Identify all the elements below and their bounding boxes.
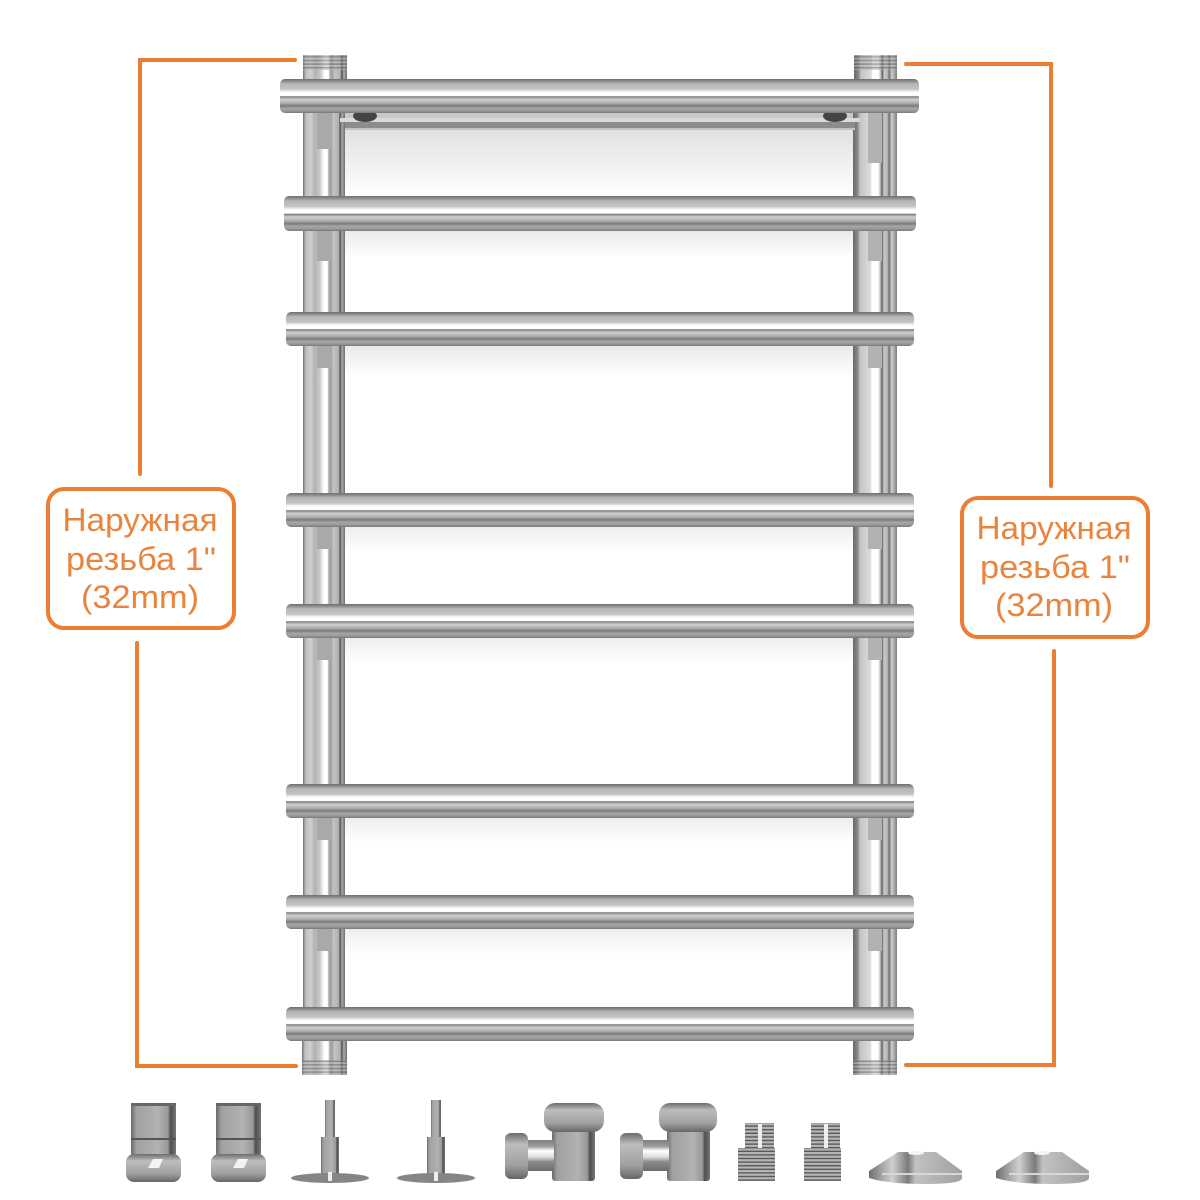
- fitting: angle valve 2: [620, 1103, 717, 1181]
- callout: right thread label: [962, 498, 1148, 637]
- upper right thread: [854, 55, 897, 79]
- fitting: cone cover 1: [869, 1151, 962, 1184]
- callout: left thread label: [48, 489, 234, 628]
- crossbar 4: [286, 493, 914, 527]
- crossbar 7: [286, 895, 914, 929]
- crossbar 2: [284, 196, 916, 231]
- callout: left thread label: резьба 1": [66, 541, 216, 577]
- left vertical pipes: [303, 113, 345, 1041]
- callout: right thread label: Наружная: [976, 510, 1132, 546]
- fitting: threaded adapter 1: [738, 1123, 775, 1181]
- callout: right thread label: резьба 1": [980, 549, 1130, 585]
- inner top frame: [340, 110, 860, 130]
- bracket: upper-left to lower-left: [137, 60, 296, 1066]
- fitting: flange pin 2: [397, 1100, 475, 1183]
- upper left thread: [303, 55, 347, 79]
- fitting: threaded adapter 2: [804, 1123, 841, 1181]
- crossbar 1 (shelf): [280, 79, 919, 113]
- lower left thread: [302, 1041, 347, 1075]
- bracket: upper-right to lower-right: [906, 64, 1054, 1065]
- right vertical pipes: [853, 113, 897, 1041]
- crossbar 5: [286, 604, 914, 638]
- fittings row: [126, 1100, 1089, 1184]
- fitting: angle valve 1: [505, 1103, 604, 1181]
- fitting: cone cover 2: [996, 1151, 1089, 1184]
- lower right thread: [853, 1041, 897, 1075]
- crossbar 3: [286, 312, 914, 346]
- callout: left thread label: (32mm): [81, 579, 199, 615]
- towel rail: [280, 55, 919, 1075]
- fitting: cap nut 2: [211, 1103, 266, 1182]
- crossbar 8: [286, 1007, 914, 1041]
- fitting: cap nut 1: [126, 1103, 181, 1182]
- callout: right thread label: (32mm): [995, 587, 1113, 623]
- fitting: flange pin 1: [291, 1100, 369, 1183]
- crossbar 6: [286, 784, 914, 818]
- callout: left thread label: Наружная: [62, 502, 218, 538]
